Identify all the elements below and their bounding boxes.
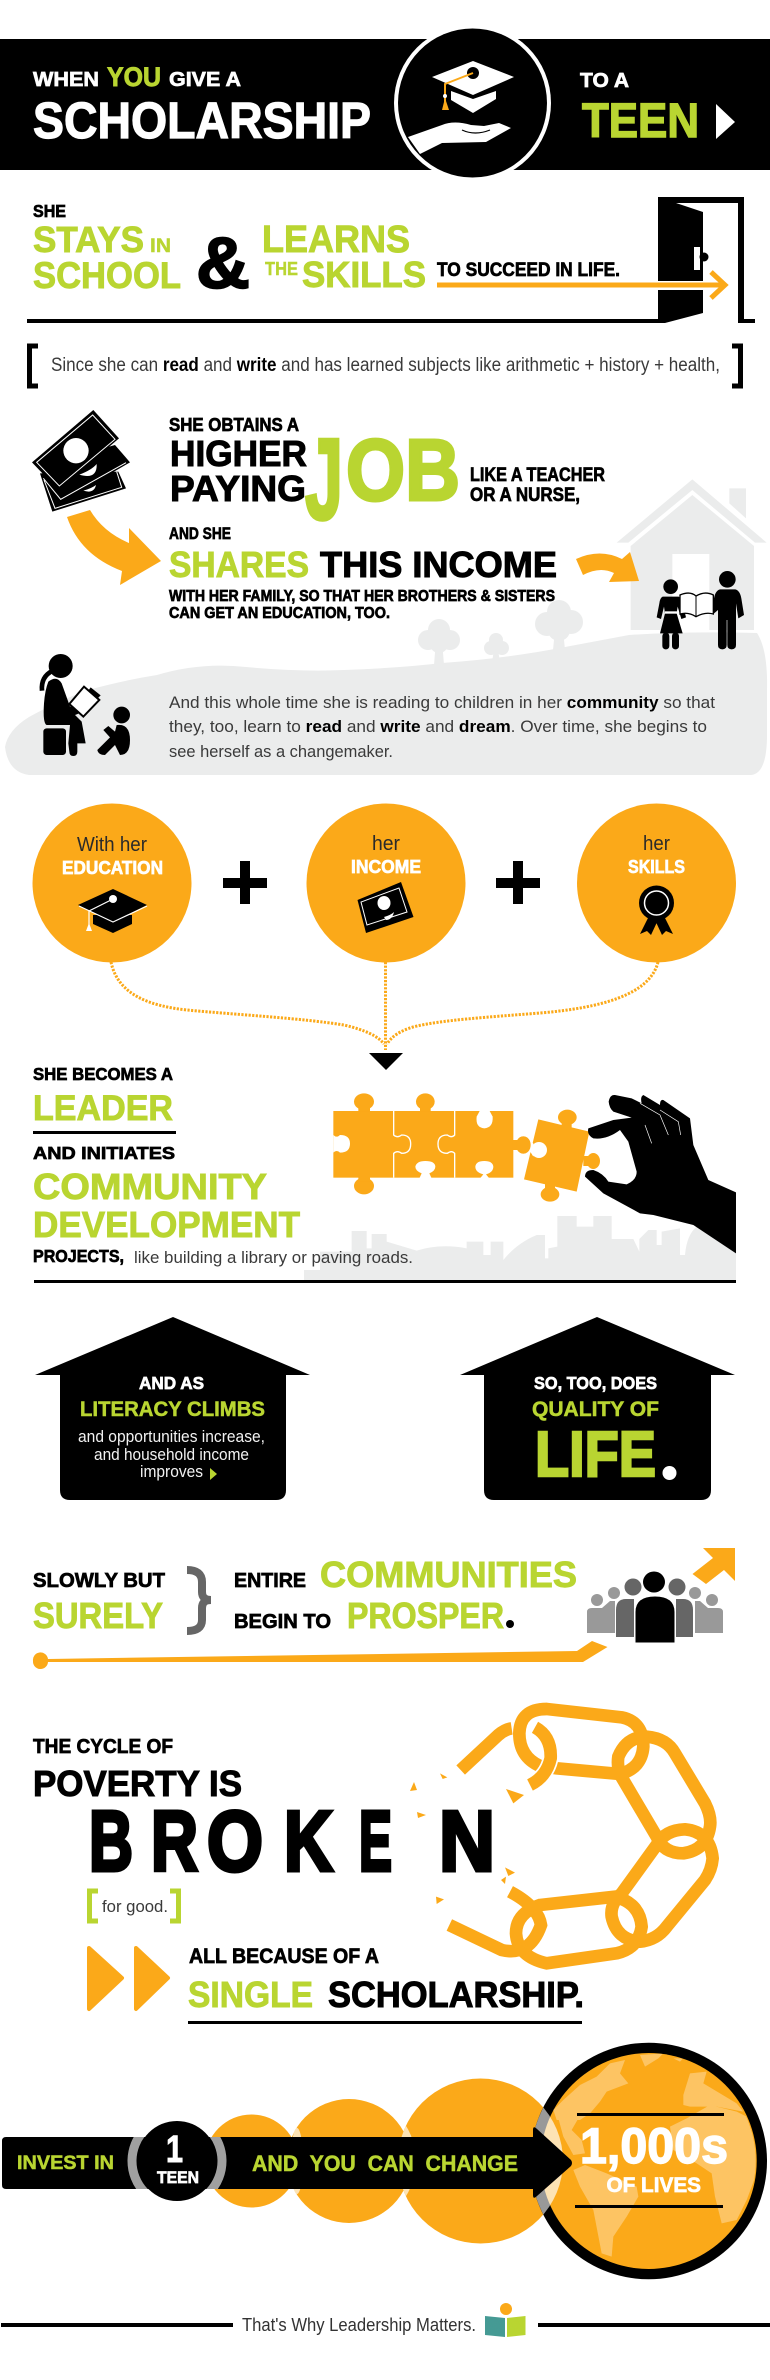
text: opportunities: and household income	[94, 1446, 249, 1464]
text: stays in school	[33, 219, 181, 296]
text: broken: K	[284, 1794, 333, 1890]
arrow: rising line	[33, 1641, 607, 1669]
paragraph: community: they, too, learn to read and write and dream. Over time, she begins to	[169, 717, 707, 736]
arrowhead	[369, 1053, 403, 1070]
text: poverty is: POVERTY IS	[33, 1763, 242, 1804]
chain shards	[410, 1773, 524, 1904]
heading: when you give a: GIVE A	[169, 68, 241, 91]
text: she: SHE	[33, 201, 66, 221]
teen circle	[137, 2121, 217, 2201]
text: broken	[89, 1794, 495, 1890]
paragraph: community: And this whole time she is reading to children in her community so that	[169, 693, 715, 712]
heading: when you give a: WHEN	[33, 68, 99, 91]
plus	[496, 861, 540, 904]
text: stays in school: SCHOOL	[33, 255, 181, 296]
text: learns the skills	[262, 219, 426, 295]
arrow: money to shares	[67, 510, 161, 585]
text: job	[305, 416, 460, 544]
teen circle ring	[128, 2137, 226, 2189]
text: and as: AND AS	[139, 1373, 204, 1393]
icon: graduation cap over hand	[408, 61, 514, 154]
text: surely: SURELY	[33, 1595, 163, 1636]
panel: slowly but surely	[33, 1554, 577, 1636]
text: single scholarship	[188, 1974, 584, 2015]
globe continents	[553, 2053, 757, 2257]
trees	[418, 600, 583, 665]
text: slowly but: SLOWLY BUT	[33, 1570, 165, 1592]
text: so too does: SO, TOO, DOES	[534, 1373, 657, 1393]
text: entire communities: ENTIRE	[234, 1570, 306, 1592]
text: job: J	[305, 416, 343, 544]
text: higher paying: HIGHER	[170, 433, 307, 474]
text: with her family: CAN GET AN EDUCATION, TOO.	[169, 605, 390, 622]
house	[617, 479, 767, 634]
text: for good: for good.	[102, 1897, 168, 1916]
text: higher paying: PAYING	[170, 468, 306, 509]
text: projects: like building a library or paving roads.	[134, 1248, 413, 1267]
text: teen: TEEN	[157, 2168, 199, 2187]
heading: scholarship: SCHOLARSHIP	[33, 92, 371, 149]
ampersand: &	[196, 224, 250, 304]
text: invest in: INVEST IN	[17, 2153, 114, 2174]
paragraph: community: see herself as a changemaker.	[169, 742, 393, 761]
background: hill, house and trees	[5, 479, 767, 775]
text: shares this income	[169, 544, 557, 585]
text: community development: DEVELOPMENT	[33, 1204, 300, 1245]
icon: double arrows	[89, 1948, 168, 2009]
text: like a teacher or a nurse	[470, 465, 605, 506]
text: for good	[90, 1891, 178, 1921]
arrow: invest bar	[2, 2121, 572, 2201]
icon: logo	[485, 2303, 526, 2337]
text: projects: PROJECTS,	[33, 1246, 124, 1266]
text: and she: AND SHE	[169, 525, 231, 543]
icon: money	[358, 882, 414, 933]
panel: shares this income	[169, 525, 557, 622]
text: shares this income: THIS INCOME	[320, 544, 557, 585]
text: single scholarship: SCHOLARSHIP.	[328, 1974, 584, 2015]
text: begin to prosper: PROSPER	[347, 1595, 504, 1636]
heading: to a: TO A	[580, 70, 629, 92]
icon: girl reading to child	[42, 654, 130, 756]
text: opportunities: and opportunities increase,	[78, 1428, 265, 1446]
text: tagline: That's Why Leadership Matters.	[242, 2315, 476, 2335]
text: leader: LEADER	[33, 1089, 173, 1128]
text: her: her	[643, 833, 670, 855]
text: opportunities	[78, 1428, 265, 1481]
text: broken: B	[89, 1794, 133, 1890]
text: of lives: OF LIVES	[606, 2174, 701, 2197]
text: shares this income: SHARES	[169, 544, 309, 585]
text: with her family	[169, 588, 555, 622]
right upper link	[618, 1737, 710, 1853]
icon: money bills	[32, 410, 130, 512]
text: with her: With her	[77, 834, 147, 856]
arrow: to the door	[437, 272, 725, 298]
top-left broken link, outer part	[461, 1728, 512, 1770]
text: broken: E	[359, 1794, 392, 1890]
globe rules	[577, 2113, 724, 2116]
white dot	[662, 1466, 676, 1480]
circle: skills	[577, 804, 736, 962]
heading: when you give a	[33, 62, 241, 92]
icon: green arrow	[210, 1468, 217, 1480]
brace	[187, 1570, 211, 1631]
text: learns the skills: THE	[265, 259, 298, 279]
circle: education	[32, 804, 192, 962]
panel: poverty broken	[33, 1736, 584, 2024]
text: stays in school: IN	[150, 236, 171, 257]
text: income: INCOME	[351, 857, 421, 877]
icon: door	[27, 197, 755, 323]
text: projects	[33, 1246, 413, 1267]
text: literacy climbs: LITERACY CLIMBS	[80, 1398, 265, 1421]
text: quality of: QUALITY OF	[532, 1398, 659, 1421]
right lower link	[611, 1829, 713, 1942]
house: quality of life	[460, 1317, 735, 1500]
text: all because of a: ALL BECAUSE OF A	[189, 1945, 379, 1968]
text: broken: O	[207, 1794, 263, 1890]
bracketed sentence	[30, 346, 740, 386]
ripple circles	[205, 2078, 563, 2244]
icon: graduation cap	[78, 889, 147, 933]
paragraph: community	[169, 693, 715, 761]
text: life: LIFE	[535, 1418, 656, 1490]
house: literacy climbs	[35, 1317, 310, 1500]
text: and you can change: AND YOU CAN CHANGE	[252, 2151, 518, 2176]
text: 1,000s: 1,000s	[580, 2118, 728, 2174]
text: like a teacher or a nurse: LIKE A TEACHER	[470, 465, 605, 486]
header banner	[0, 24, 770, 182]
icon: broken chain	[449, 1709, 713, 1963]
bottom link	[516, 1897, 642, 1963]
icon: brother and sister with book	[657, 571, 744, 649]
top-left broken link, inner part	[530, 1727, 551, 1785]
text: education: EDUCATION	[62, 858, 163, 878]
dotted connectors	[111, 962, 658, 1050]
arrow: up	[692, 1548, 735, 1584]
text: learns the skills: LEARNS	[262, 219, 410, 261]
text: stays in school: STAYS	[33, 219, 144, 260]
circle: income	[306, 804, 466, 962]
text: higher paying	[170, 433, 307, 509]
icon: white arrow	[716, 104, 735, 139]
top link	[519, 1709, 643, 1774]
text: broken: R	[151, 1794, 198, 1890]
arrow: income to family	[576, 552, 639, 582]
panel: stays in school and learns the skills	[27, 197, 755, 323]
plus	[223, 861, 267, 904]
text: entire communities: COMMUNITIES	[320, 1554, 577, 1595]
text: single scholarship: SINGLE	[188, 1974, 313, 2015]
text: community development	[33, 1166, 300, 1245]
globe	[530, 2043, 767, 2279]
panel: higher paying job	[169, 415, 605, 544]
text: begin to prosper: BEGIN TO	[234, 1611, 331, 1633]
skyline	[304, 1216, 736, 1280]
text: 1: 1	[166, 2129, 183, 2171]
hill	[5, 632, 767, 775]
panel: leader	[33, 1064, 736, 1283]
text: to succeed in life: TO SUCCEED IN LIFE.	[437, 260, 620, 281]
icon: group of people	[587, 1572, 723, 1643]
text: the cycle of: THE CYCLE OF	[33, 1736, 173, 1758]
icon: hand	[585, 1095, 736, 1253]
text: skills: SKILLS	[628, 857, 685, 877]
text: begin to prosper	[234, 1595, 514, 1636]
text: she becomes a: SHE BECOMES A	[33, 1064, 173, 1084]
bracketed sentence: Since she can read and write and has learned subjects like arithmetic + history + health,	[51, 355, 720, 376]
icon: ribbon badge	[639, 886, 674, 935]
text: job: OB	[346, 422, 460, 519]
icon: puzzle pieces	[333, 1093, 600, 1202]
heading: when you give a: YOU	[107, 62, 161, 92]
text: broken: N	[439, 1794, 495, 1890]
text: her: her	[372, 833, 400, 855]
footer	[1, 2303, 770, 2337]
text: she obtains a: SHE OBTAINS A	[169, 415, 299, 435]
text: opportunities: improves	[140, 1463, 203, 1481]
heading: teen: TEEN	[582, 95, 699, 148]
text: like a teacher or a nurse: OR A NURSE,	[470, 485, 580, 506]
text: and initiates: AND INITIATES	[33, 1143, 175, 1163]
bottom-left broken link	[449, 1892, 541, 1951]
text: community development: COMMUNITY	[33, 1166, 267, 1207]
text: with her family: WITH HER FAMILY, SO THAT HER BROTHERS & SISTERS	[169, 588, 555, 605]
text: learns the skills: SKILLS	[302, 254, 426, 295]
